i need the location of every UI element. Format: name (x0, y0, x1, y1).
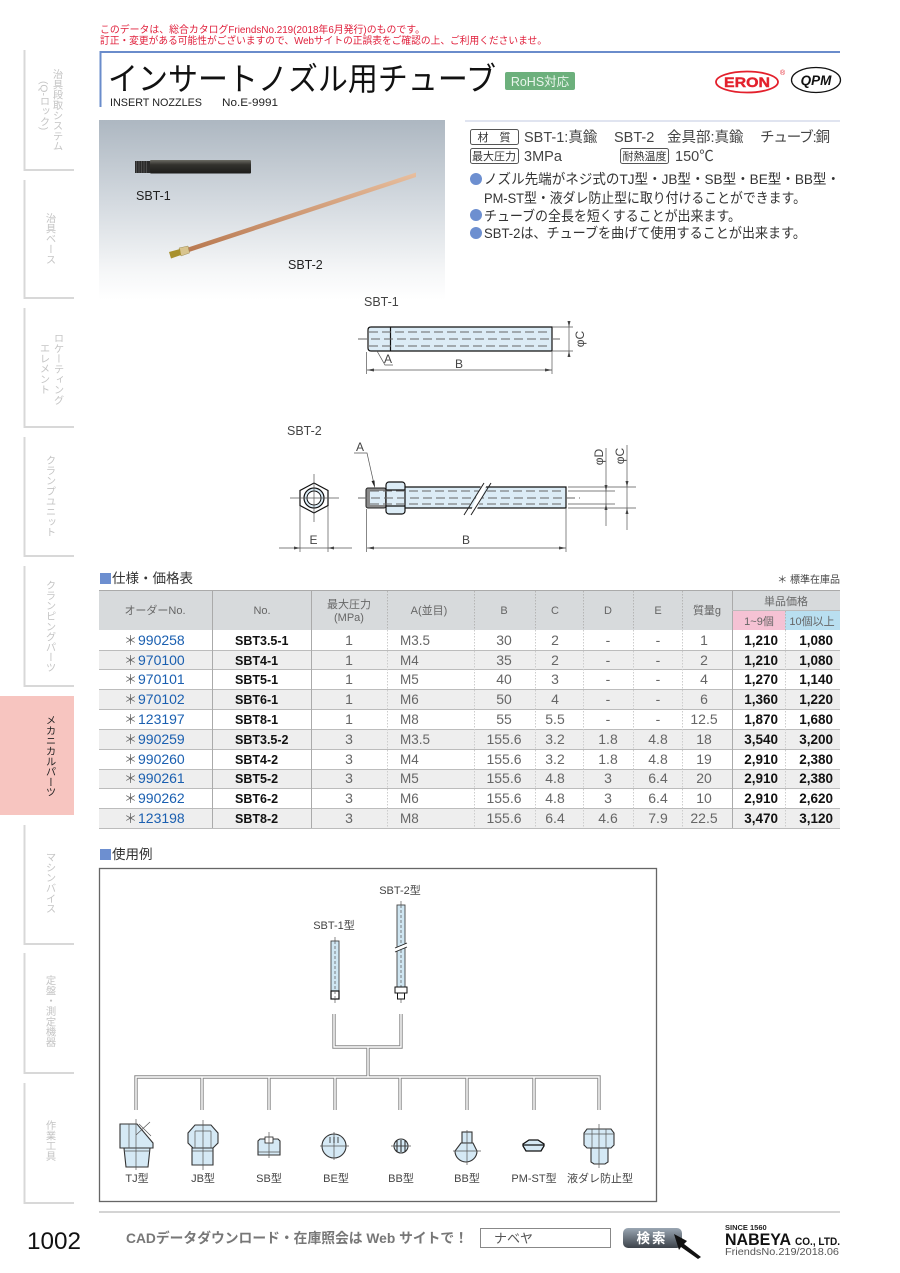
search box (480, 1228, 610, 1248)
icon: cursor arrow (674, 1234, 701, 1259)
technical drawing: SBT-1: φC (573, 330, 587, 347)
rod: SBT-1型 (313, 918, 355, 1003)
row SBT5-1 (124, 671, 833, 687)
fitting: 液ダレ防止型: 液ダレ防止型 (567, 1171, 633, 1185)
row SBT5-2: 4.8 (545, 770, 565, 786)
fitting: BE型: BE型 (323, 1171, 349, 1185)
red notice text: 訂正・変更がある可能性がございますので、Webサイトの正誤表をご確認の上、ご利用くださいませ。 (100, 34, 547, 47)
row and column rules (99, 630, 840, 828)
row SBT6-1: 970102 (138, 691, 185, 707)
spec: pressure value: 3MPa (524, 149, 563, 165)
search button (623, 1228, 682, 1248)
row SBT4-2: 19 (696, 751, 712, 767)
row SBT5-2: M5 (400, 771, 419, 786)
row SBT5-1: 1 (345, 671, 353, 687)
row SBT8-1: - (656, 711, 661, 727)
CAD download message: CADデータダウンロード・在庫照会は Web サイトで！ (126, 1230, 468, 1246)
row SBT4-1: 1,080 (799, 653, 833, 668)
row SBT5-1: 4 (700, 671, 708, 687)
row SBT4-2: 1.8 (598, 751, 618, 767)
tab: 作業工具: 作業工具 (44, 1120, 56, 1162)
technical drawing: SBT-1 (358, 295, 587, 374)
row SBT6-2: M6 (400, 791, 419, 806)
row SBT4-1: 1 (345, 652, 353, 668)
row SBT3.5-1: 1,080 (799, 633, 833, 648)
row SBT3.5-1: 1 (345, 632, 353, 648)
tab: クランピングパーツ (24, 566, 74, 686)
row SBT6-1: 1,360 (744, 692, 778, 707)
spec tag: 耐熱温度: 耐熱温度 (622, 150, 666, 163)
row SBT3.5-2: 1.8 (598, 731, 618, 747)
tab: 治具段取システム: 治具段取システム (50, 68, 63, 151)
row SBT6-2: 3 (345, 790, 353, 806)
side view: A (356, 440, 364, 454)
search button: 検索 (636, 1230, 668, 1246)
tab: ロケーティングエレメント (24, 308, 74, 427)
rod: SBT-1型: SBT-1型 (313, 918, 355, 932)
side view: φD (592, 448, 606, 465)
tab: クランプユニット (24, 437, 74, 556)
section heading: usage example: 使用例 (112, 846, 152, 862)
row SBT8-2: 3,120 (799, 811, 833, 826)
row SBT4-1: 2 (551, 652, 559, 668)
row SBT4-1: 35 (496, 652, 512, 668)
fitting: BE型 (320, 1132, 349, 1185)
tab: メカニカルパーツ (active): メカニカルパーツ (44, 715, 56, 797)
row SBT3.5-1: M3.5 (400, 633, 430, 648)
row SBT3.5-2: 3.2 (545, 731, 565, 747)
tab: クランピングパーツ: クランピングパーツ (44, 580, 56, 673)
row SBT8-2: M8 (400, 811, 419, 826)
spec: material values: SBT-1:真鍮 (524, 128, 598, 146)
spec: material values: チューブ:銅 (760, 128, 830, 146)
row SBT3.5-1: 1,210 (744, 633, 778, 648)
search box: ナベヤ (494, 1231, 533, 1246)
row SBT3.5-1: 1 (700, 632, 708, 648)
row SBT4-2: 3.2 (545, 751, 565, 767)
row SBT6-2: 2,910 (744, 791, 778, 806)
tab: 作業工具 (24, 1083, 74, 1203)
usage example panel (100, 868, 656, 1202)
feature bullets: ノズル先端がネジ式のTJ型・JB型・SB型・BE型・BB型・ (484, 171, 840, 187)
row SBT6-1: - (656, 691, 661, 707)
company logo: NABEYA (725, 1230, 791, 1249)
row SBT4-2: ＊ (124, 752, 137, 767)
row SBT8-1: 1,680 (799, 712, 833, 727)
row SBT3.5-2: ＊ (124, 732, 137, 747)
row SBT6-1: 50 (496, 691, 512, 707)
row SBT8-2: 22.5 (690, 810, 718, 826)
fitting: SB型 (256, 1132, 282, 1185)
tab: マシンバイス (24, 825, 74, 944)
side view (354, 440, 636, 552)
row SBT8-2: 7.9 (648, 810, 668, 826)
spec: material values (524, 128, 830, 146)
section heading: spec and price table: 仕様・価格表 (112, 571, 193, 586)
spec: material values: SBT-2 (614, 130, 654, 146)
row SBT3.5-2: 990259 (138, 731, 185, 747)
row SBT5-1: 1,270 (744, 672, 778, 687)
red notice text: このデータは、総合カタログFriendsNo.219(2018年6月発行)のものです。 (100, 23, 425, 36)
row SBT8-1: 123197 (138, 711, 185, 727)
spec tag: 最大圧力: 最大圧力 (472, 149, 516, 163)
feature bullets: チューブの全長を短くすることが出来ます。 (484, 208, 741, 224)
row SBT6-2: 990262 (138, 790, 185, 806)
table header: B (500, 605, 508, 617)
row SBT8-2: 6.4 (545, 810, 565, 826)
heading: インサートノズル用チューブ (108, 61, 496, 97)
row SBT8-1: ＊ (124, 712, 137, 727)
row SBT5-1: SBT5-1 (235, 673, 278, 687)
company logo: FriendsNo.219/2018.06 (725, 1247, 839, 1258)
row SBT8-2: ＊ (124, 811, 137, 826)
row SBT6-2: ＊ (124, 791, 137, 806)
row SBT3.5-2: SBT3.5-2 (235, 733, 289, 747)
row SBT6-2: 4.8 (545, 790, 565, 806)
row SBT3.5-1: 990258 (138, 632, 185, 648)
row SBT8-1: - (606, 711, 611, 727)
row SBT5-2: 6.4 (648, 770, 668, 786)
row SBT8-1: 1 (345, 711, 353, 727)
table header: C (551, 605, 559, 617)
row SBT4-2: 2,910 (744, 752, 778, 767)
row SBT6-1: 1,220 (799, 692, 833, 707)
row SBT6-2: 3 (604, 790, 612, 806)
row SBT6-2: 10 (696, 790, 712, 806)
row SBT5-1: - (606, 671, 611, 687)
product photo (99, 120, 445, 300)
row SBT8-1: 12.5 (690, 711, 718, 727)
row SBT8-1 (124, 711, 833, 727)
row SBT8-2 (124, 810, 833, 826)
row SBT5-2: SBT5-2 (235, 772, 278, 786)
row SBT3.5-2 (124, 731, 833, 747)
fitting: BB型 with stem: BB型 (454, 1171, 480, 1185)
table header: A(並目) (411, 603, 447, 617)
label: SBT-2: SBT-2 (288, 258, 323, 272)
logo: ERON: ® (780, 69, 786, 77)
row SBT5-1: 40 (496, 671, 512, 687)
fitting: BB型: BB型 (388, 1171, 414, 1185)
fitting: PM-ST型 (511, 1140, 557, 1185)
row SBT3.5-1: ＊ (124, 633, 137, 648)
row SBT8-1: SBT8-1 (235, 713, 278, 727)
row SBT4-1: ＊ (124, 653, 137, 668)
technical drawing: SBT-1: A (384, 352, 392, 366)
row SBT4-2: 990260 (138, 751, 185, 767)
row SBT8-2: 3 (345, 810, 353, 826)
table header: No. (253, 605, 271, 617)
hex end view: E (309, 533, 318, 547)
row SBT3.5-2: 3,540 (744, 732, 778, 747)
row SBT3.5-2: M3.5 (400, 732, 430, 747)
row SBT8-2: 4.6 (598, 810, 618, 826)
fitting: JB型 (188, 1120, 218, 1185)
row SBT4-1: M4 (400, 653, 419, 668)
table header: D (604, 605, 612, 617)
fitting: SB型: SB型 (256, 1171, 282, 1185)
tab: 治具段取システム (24, 50, 74, 170)
row SBT5-1: ＊ (124, 672, 137, 687)
row SBT5-1: - (656, 671, 661, 687)
company logo (725, 1223, 840, 1258)
row SBT4-2: SBT4-2 (235, 753, 278, 767)
logo: QPM (792, 68, 840, 92)
fitting: 液ダレ防止型 (567, 1124, 633, 1185)
row SBT6-1 (124, 691, 833, 707)
logo: QPM: QPM (801, 73, 832, 88)
row SBT6-2 (124, 790, 833, 806)
fitting: BB型 with stem (453, 1130, 481, 1185)
fitting: TJ型: TJ型 (125, 1171, 149, 1185)
row SBT3.5-1: - (606, 632, 611, 648)
row SBT4-2: 2,380 (799, 752, 833, 767)
note: standard stock: ＊ 標準在庫品 (777, 573, 840, 586)
badge: RoHS (505, 72, 575, 90)
table header: 10個以上 (789, 615, 835, 628)
page number: 1002 (27, 1228, 81, 1255)
row SBT6-2: SBT6-2 (235, 792, 278, 806)
row SBT5-2 (124, 770, 833, 786)
row SBT4-1: - (656, 652, 661, 668)
fitting: PM-ST型: PM-ST型 (511, 1171, 557, 1185)
tab: 治具ベース (24, 180, 74, 298)
rod: SBT-2型: SBT-2型 (379, 883, 421, 897)
table header: 単品価格 (764, 594, 808, 608)
row SBT8-1: 55 (496, 711, 512, 727)
tab: クランプユニット: クランプユニット (44, 455, 56, 537)
row SBT4-1: - (606, 652, 611, 668)
tab: ロケーティングエレメント: エレメント (38, 343, 50, 394)
spec tag: 材質 (470, 130, 518, 144)
row SBT3.5-2: 3 (345, 731, 353, 747)
rod: SBT-2 (169, 172, 416, 258)
feature bullets: PM-ST型・液ダレ防止型に取り付けることができます。 (484, 190, 806, 206)
tab: 定盤・測定機器: 定盤・測定機器 (44, 975, 56, 1048)
row SBT4-1: 2 (700, 652, 708, 668)
spec: temperature value: 150℃ (675, 149, 714, 165)
row SBT6-2: 6.4 (648, 790, 668, 806)
fitting: BB型 (388, 1139, 414, 1185)
row SBT8-2: SBT8-2 (235, 812, 278, 826)
row SBT8-1: 5.5 (545, 711, 565, 727)
row SBT5-1: 1,140 (799, 672, 833, 687)
row SBT4-1: 1,210 (744, 653, 778, 668)
row SBT6-1: 6 (700, 691, 708, 707)
tab: メカニカルパーツ (active) (0, 696, 74, 815)
row SBT6-1: 4 (551, 691, 559, 707)
row stripes (99, 650, 840, 828)
feature bullets (470, 171, 840, 241)
table header: 質量g (693, 603, 721, 617)
spec: material values: 金具部:真鍮 (667, 128, 744, 146)
company logo: CO., LTD. (795, 1236, 840, 1248)
row SBT3.5-1: - (656, 632, 661, 648)
row SBT3.5-2: 4.8 (648, 731, 668, 747)
row SBT5-2: 990261 (138, 770, 185, 786)
row SBT5-1: 970101 (138, 671, 185, 687)
row SBT4-2 (124, 751, 833, 767)
rod: SBT-2型 (379, 883, 421, 1003)
feature bullets: SBT-2は、チューブを曲げて使用することが出来ます。 (484, 225, 806, 241)
fitting: JB型: JB型 (191, 1171, 215, 1185)
tab: マシンバイス: マシンバイス (44, 852, 56, 914)
row SBT4-2: 155.6 (486, 751, 522, 767)
row SBT4-2: 3 (345, 751, 353, 767)
row SBT5-1: 3 (551, 671, 559, 687)
logo: ERON: ERON (724, 74, 770, 90)
row SBT6-1: M6 (400, 692, 419, 707)
row SBT8-2: 155.6 (486, 810, 522, 826)
spec and price table (99, 590, 840, 828)
sidebar navigation (0, 50, 74, 1203)
row SBT5-2: 3 (604, 770, 612, 786)
row SBT4-1: 970100 (138, 652, 185, 668)
technical drawing: SBT-1: B (455, 357, 463, 371)
tab: 治具ベース: 治具ベース (44, 212, 56, 264)
technical drawing: SBT-2 (279, 424, 636, 552)
row SBT5-2: 3 (345, 770, 353, 786)
subtitle (110, 97, 278, 109)
row SBT6-2: 2,620 (799, 791, 833, 806)
row SBT6-1: - (606, 691, 611, 707)
company logo: SINCE 1560 (725, 1223, 767, 1232)
row SBT4-1 (124, 652, 833, 668)
row SBT3.5-1: 30 (496, 632, 512, 648)
table header: (MPa) (334, 612, 364, 624)
row SBT8-2: 123198 (138, 810, 185, 826)
label: SBT-1 (364, 295, 399, 309)
row SBT8-1: M8 (400, 712, 419, 727)
subtitle: INSERT NOZZLES (110, 97, 202, 109)
subtitle: No.E-9991 (222, 97, 278, 109)
tab: ロケーティングエレメント: ロケーティング (52, 333, 64, 405)
red notice text (100, 23, 547, 47)
row SBT3.5-2: 155.6 (486, 731, 522, 747)
row SBT4-2: M4 (400, 752, 419, 767)
table header: E (654, 605, 662, 617)
row SBT6-1: ＊ (124, 692, 137, 707)
row SBT8-1: 1,870 (744, 712, 778, 727)
side view: B (462, 533, 470, 547)
badge: RoHS: RoHS対応 (511, 75, 570, 89)
title block (100, 52, 840, 109)
fitting: TJ型 (120, 1119, 153, 1185)
specifications (465, 121, 840, 165)
row SBT4-2: 4.8 (648, 751, 668, 767)
row SBT6-1: 1 (345, 691, 353, 707)
row SBT3.5-1: 2 (551, 632, 559, 648)
row SBT5-2: 2,910 (744, 771, 778, 786)
row SBT5-2: ＊ (124, 771, 137, 786)
side view: φC (613, 447, 627, 464)
logo: ERON (716, 69, 786, 92)
tab: 定盤・測定機器 (24, 953, 74, 1073)
table header: 最大圧力 (327, 597, 371, 611)
row SBT5-2: 20 (696, 770, 712, 786)
row SBT6-1: SBT6-1 (235, 693, 278, 707)
footer (27, 1212, 840, 1259)
row SBT5-2: 2,380 (799, 771, 833, 786)
row SBT5-1: M5 (400, 672, 419, 687)
table header (99, 590, 840, 630)
row SBT4-1: SBT4-1 (235, 654, 278, 668)
row SBT3.5-2: 18 (696, 731, 712, 747)
spec tag: 材質: 材 質 (478, 130, 510, 144)
row SBT3.5-1: SBT3.5-1 (235, 634, 289, 648)
tab: 治具段取システム: (Q-ロック) (38, 81, 49, 130)
rod: SBT-1 (135, 160, 251, 174)
table header: オーダーNo. (124, 603, 186, 617)
row SBT6-2: 155.6 (486, 790, 522, 806)
row SBT3.5-1 (124, 632, 833, 648)
pipe manifold (136, 1014, 599, 1110)
table header: 1~9個 (744, 615, 774, 628)
label: SBT-2 (287, 424, 322, 438)
label: SBT-1: SBT-1 (136, 189, 171, 203)
row SBT3.5-2: 3,200 (799, 732, 833, 747)
hex end view (279, 474, 352, 552)
row SBT5-2: 155.6 (486, 770, 522, 786)
row SBT8-2: 3,470 (744, 811, 778, 826)
